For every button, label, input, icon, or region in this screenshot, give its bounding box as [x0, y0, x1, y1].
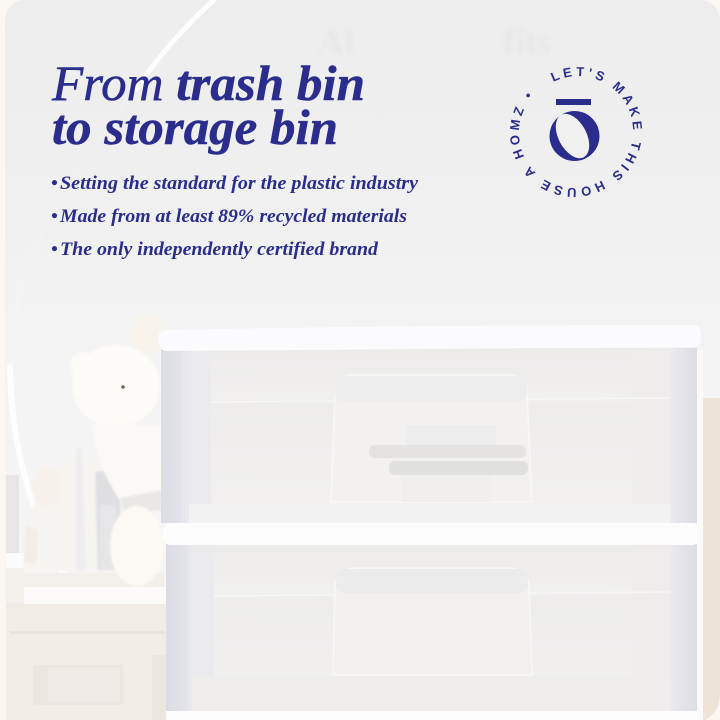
storage drawers unit [158, 325, 703, 720]
fabric bag behind toy [24, 446, 122, 572]
bullet one: Setting the standard for the plastic industry [60, 173, 419, 194]
circular slogan: LET'S MAKE THIS HOUSE A HOMZ • [510, 67, 642, 197]
upper drawer [161, 348, 697, 523]
shelf top [24, 587, 169, 604]
faint ghost lettering [318, 22, 551, 62]
circular logo badge [510, 67, 642, 197]
toy body [70, 314, 165, 586]
toy eye [121, 385, 125, 389]
lower drawer [166, 544, 697, 714]
faint ghost lettering: Al [318, 22, 354, 62]
top lid [158, 325, 701, 351]
middle rail [163, 523, 700, 545]
faint ghost lettering: fits [503, 22, 551, 62]
bullet three: • [51, 239, 58, 260]
curved white arc [10, 0, 216, 590]
logo bar [556, 99, 591, 105]
cabinet body [6, 600, 171, 720]
lower drawer handle [333, 568, 532, 675]
plush toy [24, 314, 165, 586]
logo ring [549, 108, 600, 164]
bullet one: • [51, 173, 58, 194]
bullet two: • [51, 206, 58, 227]
title: to storage bin [52, 99, 338, 155]
bullet three: The only independently certified brand [60, 239, 379, 260]
bullet list [51, 173, 419, 260]
bullet two: Made from at least 89% recycled materials [59, 206, 407, 227]
cabinet [6, 475, 171, 720]
right cream wall strip [703, 398, 720, 720]
upper drawer handle [331, 375, 532, 502]
cabinet door panel [33, 665, 123, 705]
title [51, 55, 365, 155]
title: From trash bin [51, 55, 365, 111]
